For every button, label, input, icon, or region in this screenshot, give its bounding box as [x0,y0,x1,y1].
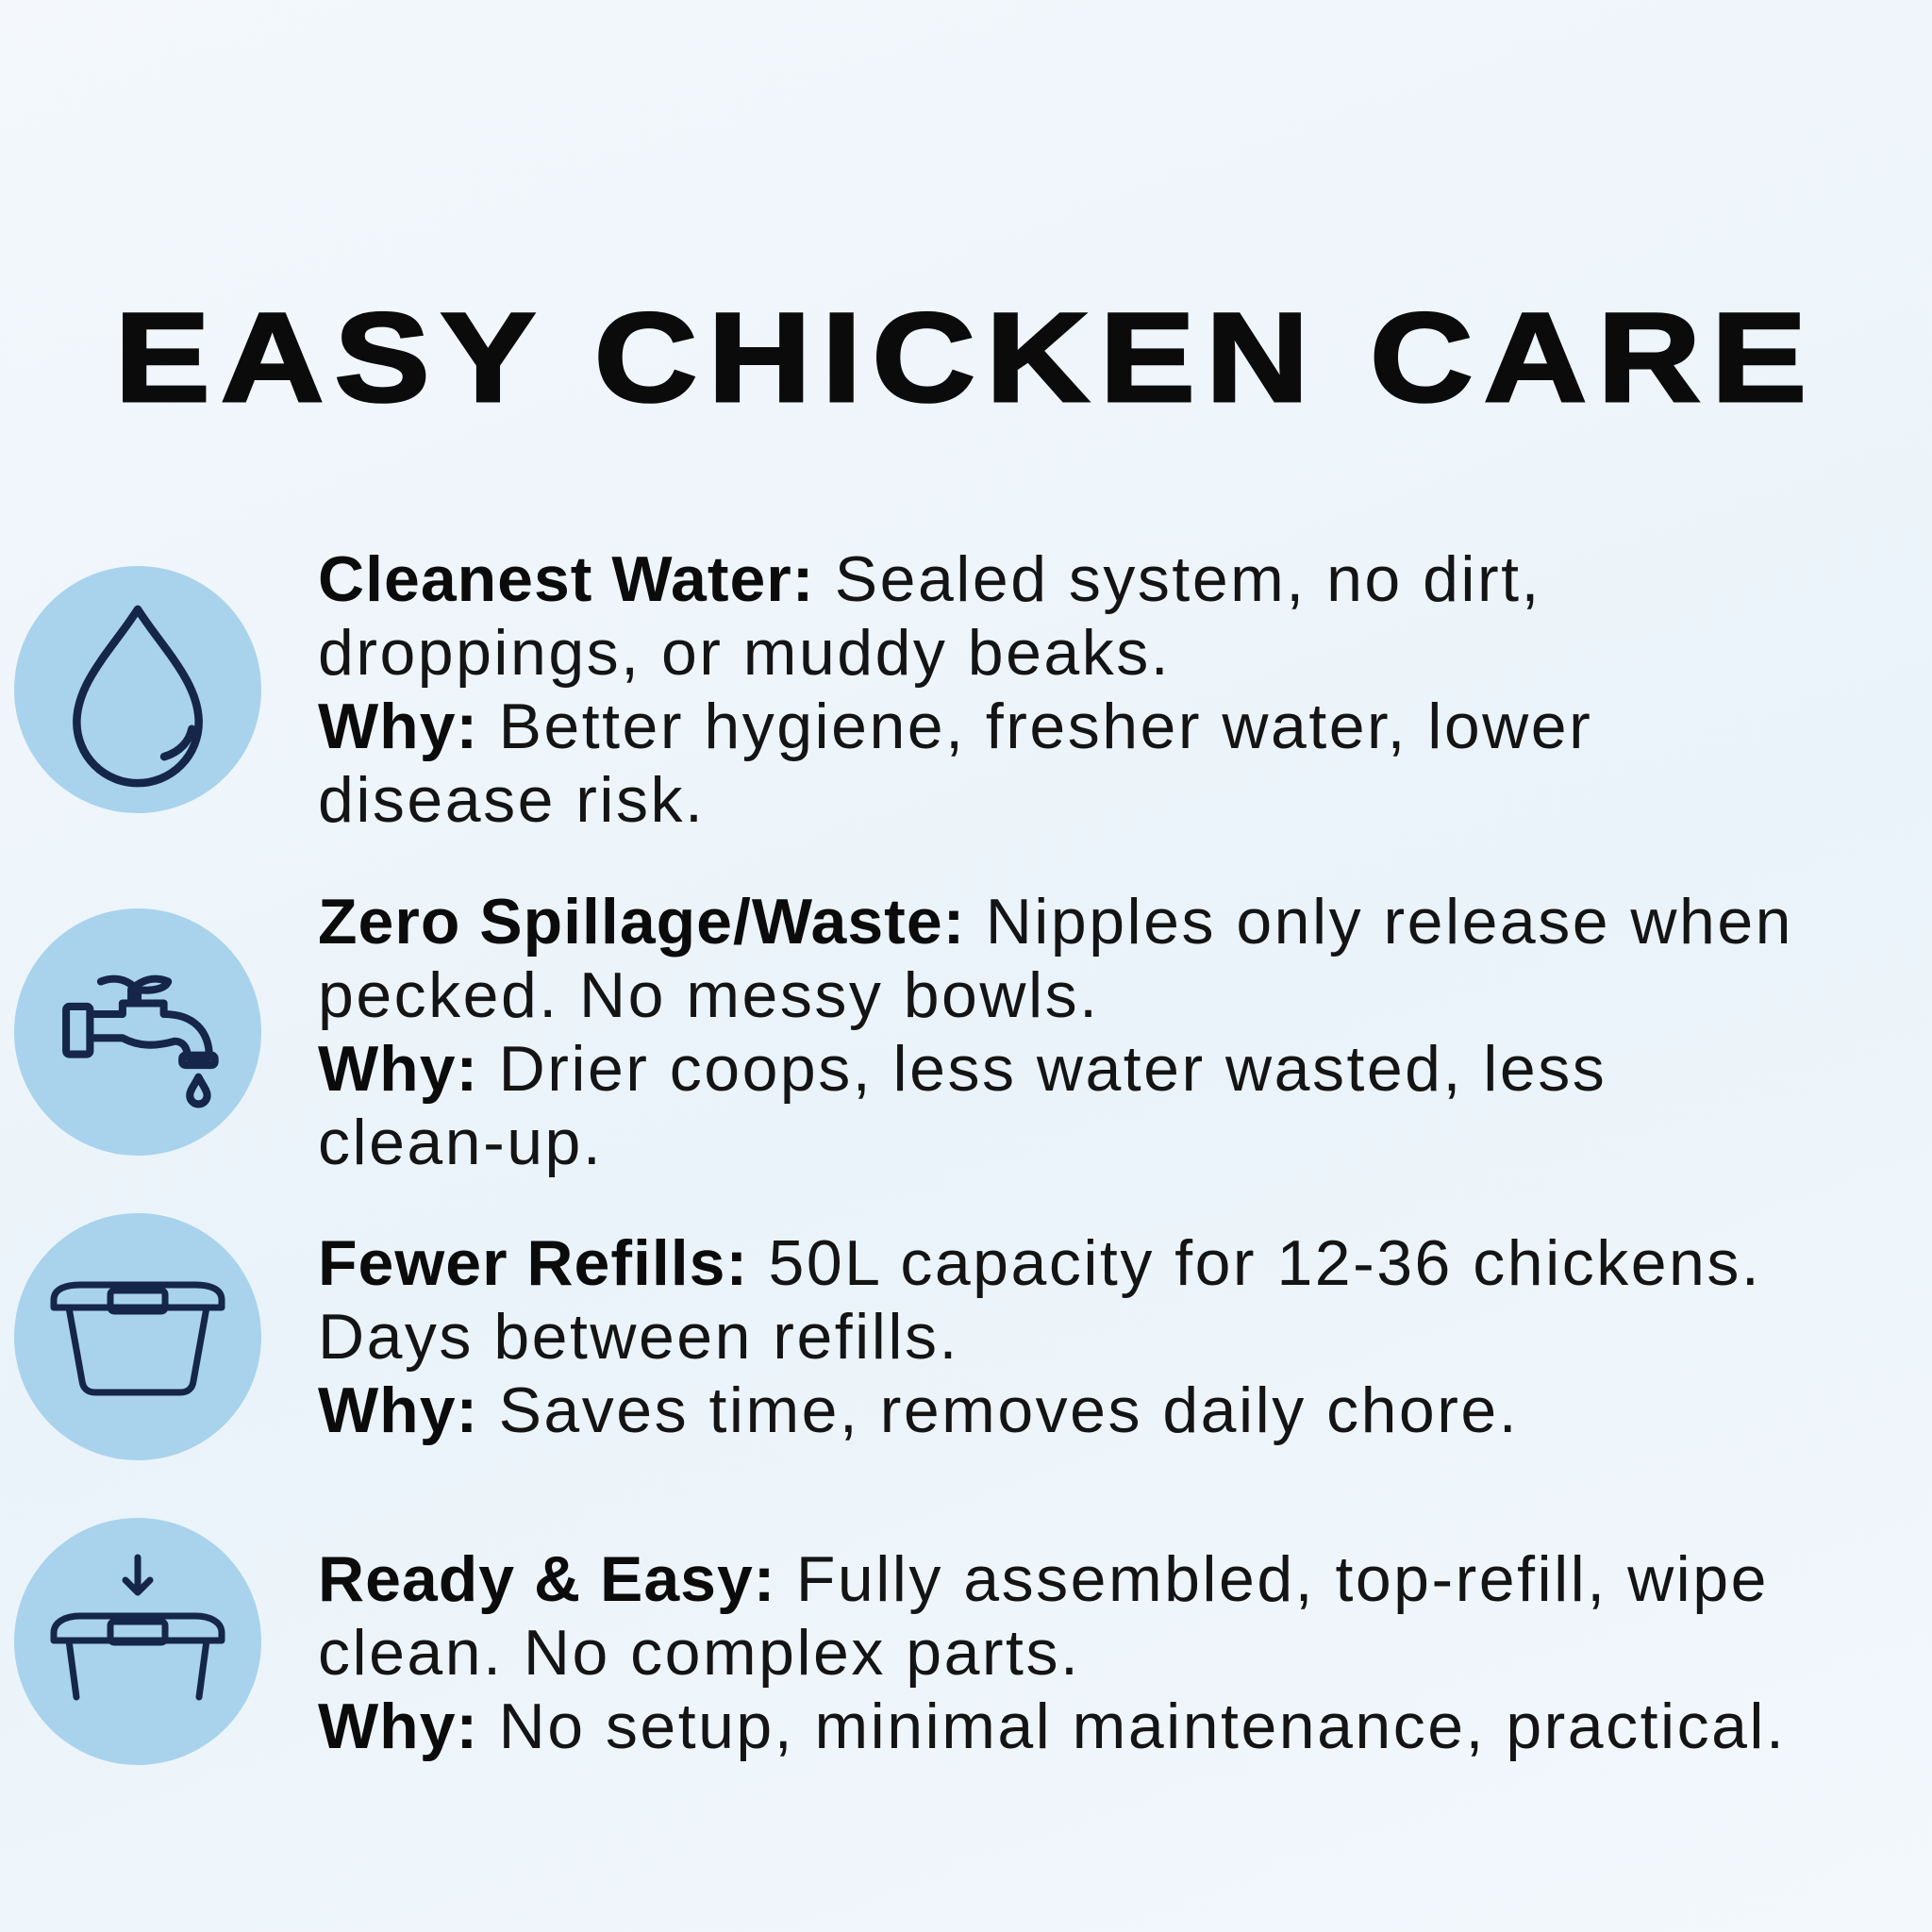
icon: lid with arrow [14,1518,261,1765]
icon: tap [14,908,261,1156]
text: fewer refills [318,1227,1761,1446]
text: ready & easy: clean. No complex parts. [318,1617,1080,1689]
icon: water drop [14,566,261,813]
text: cleanest water: disease risk. [318,764,705,836]
text: fewer refills: Days between refills. [318,1301,959,1373]
text: zero spillage: clean-up. [318,1107,603,1178]
text: zero spillage: pecked. No messy bowls. [318,959,1099,1031]
text: fewer refills: Why: Saves time, removes daily chore. [318,1374,1519,1446]
text: zero spillage: Why: Drier coops, less water wasted, less [318,1033,1607,1105]
text: zero spillage [318,886,1793,1178]
text: cleanest water [318,543,1592,836]
text: cleanest water: Why: Better hygiene, fresher water, lower [318,691,1592,762]
title: EASY CHICKEN CARE [115,288,1817,428]
text: ready & easy: Why: No setup, minimal maintenance, practical. [318,1690,1786,1762]
icon: container [14,1213,261,1460]
text: cleanest water: droppings, or muddy beaks. [318,617,1171,689]
text: ready & easy [318,1543,1786,1762]
text: fewer refills: Fewer Refills: 50L capacity for 12-36 chickens. [318,1227,1761,1299]
text: cleanest water: Cleanest Water: Sealed system, no dirt, [318,543,1541,615]
text: zero spillage: Zero Spillage/Waste: Nipples only release when [318,886,1793,958]
text: ready & easy: Ready & Easy: Fully assembled, top-refill, wipe [318,1543,1769,1615]
